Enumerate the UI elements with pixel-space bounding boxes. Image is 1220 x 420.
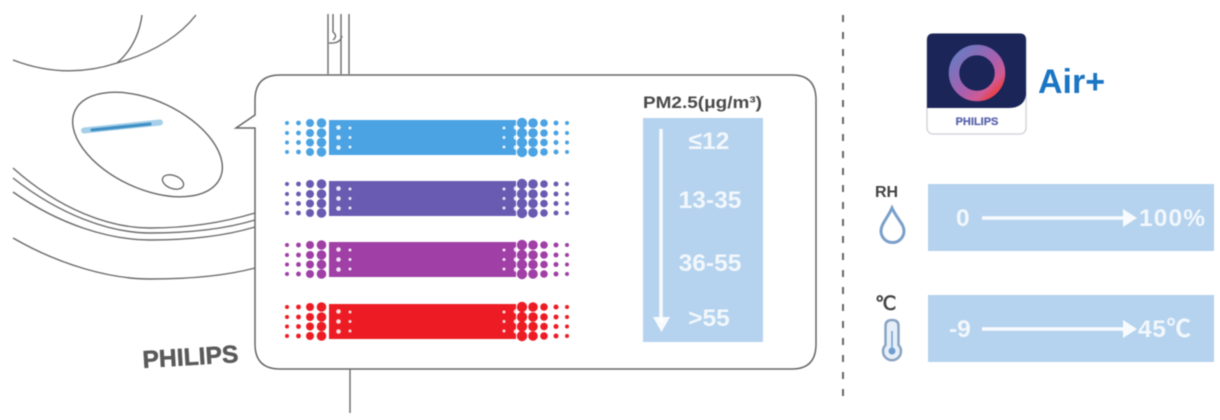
- device stem lines top: [328, 14, 349, 74]
- humidity range panel: [928, 184, 1214, 251]
- sensor panel ellipse: [56, 71, 239, 218]
- temperature min: -9: [949, 316, 971, 343]
- temperature max: 45℃: [1138, 316, 1191, 343]
- device base arcs: [13, 168, 255, 279]
- indicator light glow: [84, 122, 160, 130]
- scale value 4: >55: [688, 305, 730, 332]
- icon: thermometer: [883, 320, 901, 360]
- temperature arrow: [982, 320, 1137, 338]
- colour bar: purple: [285, 240, 569, 279]
- indicator light: [92, 124, 150, 130]
- scale value 1: ≤12: [689, 128, 729, 155]
- humidity max: 100%: [1139, 205, 1205, 232]
- colour bar: indigo: [285, 179, 569, 218]
- humidity label: RH: [875, 184, 898, 201]
- sensor button: [160, 172, 186, 192]
- icon dark background: [927, 34, 1026, 108]
- temperature label: ℃: [875, 294, 896, 315]
- device line drawing: [13, 14, 350, 413]
- humidity arrow: [982, 209, 1137, 227]
- icon brand text: PHILIPS: [956, 116, 998, 128]
- colour bar: red: [285, 302, 569, 341]
- device stem line bottom: [349, 369, 351, 413]
- callout bubble: [236, 75, 816, 369]
- colour bar: blue: [285, 118, 569, 157]
- Air+ app name: Air+: [1038, 63, 1105, 101]
- device top curves: [13, 15, 196, 71]
- thermometer mercury: [891, 331, 893, 350]
- dashed divider: [842, 15, 844, 405]
- scale value 3: 36-55: [679, 250, 741, 277]
- PM2.5 scale panel: [643, 118, 763, 342]
- icon: water drop: [881, 208, 904, 242]
- PHILIPS brand label: PHILIPS: [142, 341, 239, 374]
- Air+ app icon: [927, 34, 1026, 134]
- temperature range panel: [928, 295, 1214, 362]
- icon ring: [954, 50, 1000, 96]
- scale arrow: [659, 129, 663, 322]
- scale value 2: 13-35: [679, 187, 741, 214]
- humidity min: 0: [956, 205, 970, 232]
- PM2.5 heading: PM2.5(μg/m³): [643, 94, 762, 112]
